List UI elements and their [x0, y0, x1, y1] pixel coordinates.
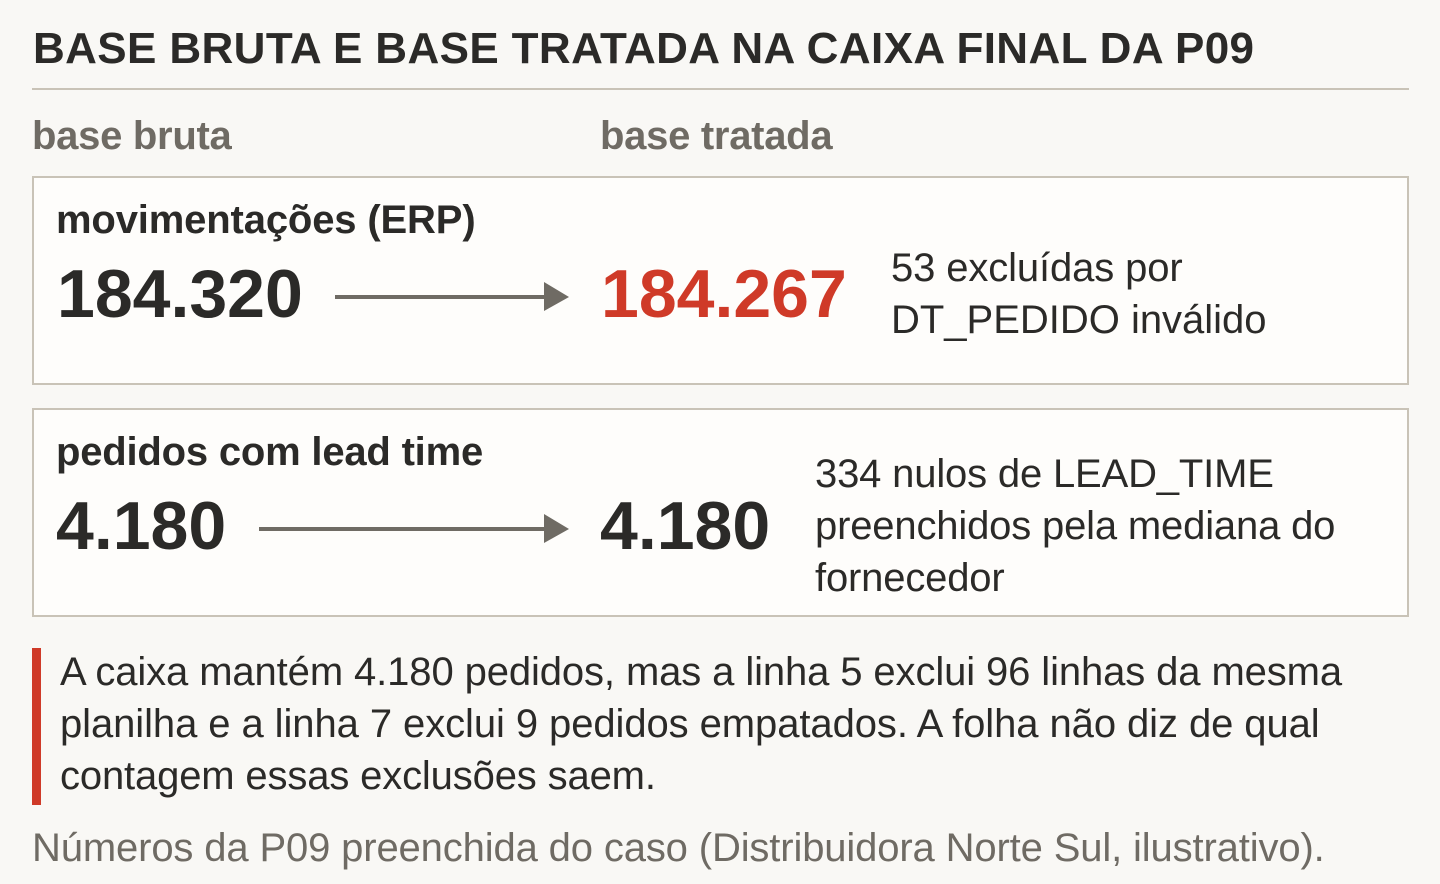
arrow: [259, 514, 569, 543]
callout text: planilha e a linha 7 exclui 9 pedidos empatados. A folha não diz de qual: [60, 702, 1320, 746]
header rule: [32, 88, 1409, 90]
note: preenchidos pela mediana do: [815, 504, 1335, 548]
column heading: base bruta: base bruta: [32, 114, 232, 158]
callout text: [60, 650, 1342, 798]
note: 334 nulos de LEAD_TIME: [815, 452, 1274, 496]
callout accent bar: [32, 648, 41, 805]
title: BASE BRUTA E BASE TRATADA NA CAIXA FINAL DA P09: [33, 24, 1254, 73]
raw value: 184.320: [57, 256, 303, 332]
callout text: A caixa mantém 4.180 pedidos, mas a linha 5 exclui 96 linhas da mesma: [60, 650, 1342, 694]
source note: Números da P09 preenchida do caso (Distribuidora Norte Sul, ilustrativo).: [32, 826, 1325, 870]
treated value: 184.267: [601, 256, 847, 332]
panel label: pedidos com lead time: [56, 430, 483, 474]
panel label: movimentações (ERP): [56, 198, 476, 242]
note: fornecedor: [815, 556, 1005, 600]
note: [891, 246, 1267, 342]
callout text: contagem essas exclusões saem.: [60, 754, 656, 798]
column heading: base tratada: base tratada: [600, 114, 832, 158]
arrow: [335, 282, 569, 311]
note: [815, 452, 1335, 600]
raw value: 4.180: [56, 488, 226, 564]
note: 53 excluídas por: [891, 246, 1183, 290]
panel: pedidos com lead time: [32, 408, 1409, 617]
panel: movimentações: [32, 176, 1409, 385]
treated value: 4.180: [600, 488, 770, 564]
note: DT_PEDIDO inválido: [891, 298, 1267, 342]
callout: [32, 648, 1342, 805]
